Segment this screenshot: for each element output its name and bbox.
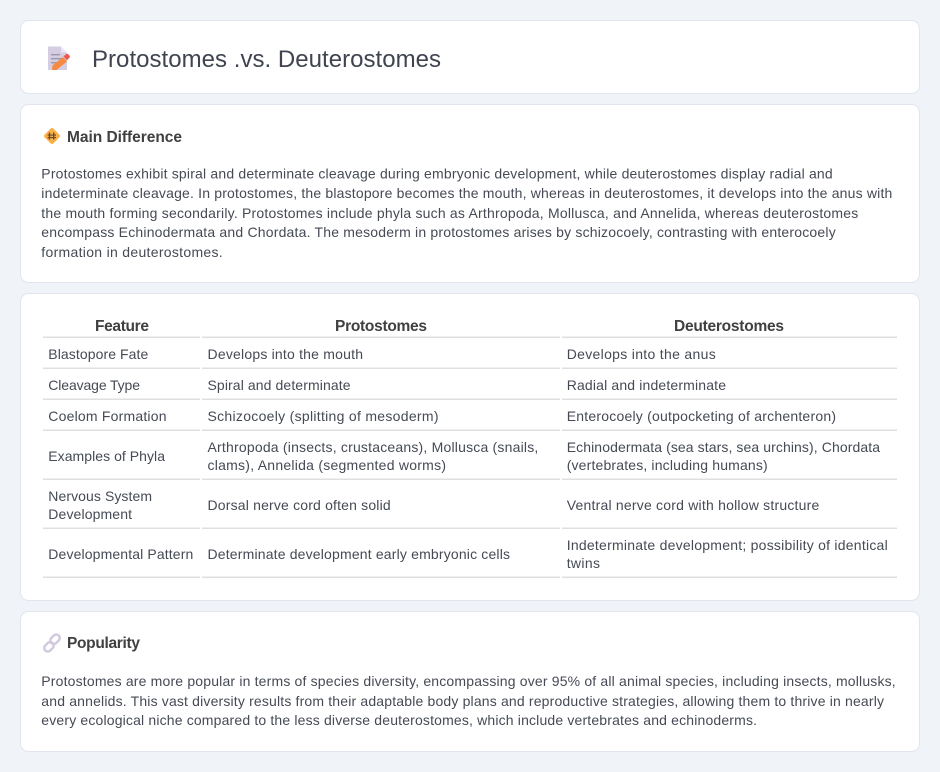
row: coelom formation: Enterocoely (outpocketing of archenteron) [567,408,836,424]
row: nervous system development [48,488,820,522]
table header: Feature [95,318,149,335]
row: developmental pattern [48,537,888,571]
row: cleavage type [48,377,726,393]
heading: main difference: Main Difference [67,129,182,146]
text block: main difference [41,166,892,260]
text block: main difference: the mouth forming secondarily. Protostomes include phyla such as Arthropoda, Mollusca, and Annelida, whereas deuterostomes [41,205,858,221]
text block: main difference: formation in deuterostomes. [41,244,223,260]
row: coelom formation: Coelom Formation [48,408,166,424]
table header [95,318,784,335]
row: examples of phyla [48,439,880,473]
row: examples of phyla: Examples of Phyla [48,448,165,464]
text block: popularity: Protostomes are more popular in terms of species diversity, encompassing over 95% of all animal species, including insects, mollusks, [41,673,896,689]
row: developmental pattern: Determinate development early embryonic cells [208,546,510,562]
row: coelom formation: Schizocoely (splitting of mesoderm) [208,408,438,424]
row: blastopore fate: Blastopore Fate [48,346,149,362]
row: blastopore fate: Develops into the anus [567,346,716,362]
row: nervous system development: Dorsal nerve cord often solid [208,497,391,513]
row: examples of phyla: (vertebrates, including humans) [567,457,768,473]
row: nervous system development: Development [48,506,132,522]
row: examples of phyla: Arthropoda (insects, crustaceans), Mollusca (snails, [208,439,538,455]
text block: popularity: every ecological niche compared to the less diverse deuterostomes, which include vertebrates and echinoderms. [41,712,757,728]
row: blastopore fate [48,346,716,362]
table header: Deuterostomes [674,318,784,335]
row: cleavage type: Cleavage Type [48,377,140,393]
row: examples of phyla: clams), Annelida (segmented worms) [208,457,446,473]
row: cleavage type: Radial and indeterminate [567,377,726,393]
text block: main difference: Protostomes exhibit spiral and determinate cleavage during embryonic development, while deuterostomes display radial and [41,166,833,182]
text block: main difference: encompass Echinodermata and Chordata. The mesoderm in protostomes arises by schizocoely, contrasting with enterocoely [41,224,836,240]
row: blastopore fate: Develops into the mouth [208,346,363,362]
table header: Protostomes [335,318,427,335]
row: examples of phyla: Echinodermata (sea stars, sea urchins), Chordata [567,439,880,455]
panel: comparison table [20,294,920,600]
panel: popularity [20,612,920,752]
panel: main difference [20,104,920,282]
icon: document with pencil [48,46,70,70]
text block: main difference: indeterminate cleavage. In protostomes, the blastopore becomes the mouth, whereas in deuterostomes, it develops into the anus with [41,185,892,201]
row: nervous system development: Ventral nerve cord with hollow structure [567,497,820,513]
icon: chain link [43,633,61,653]
row: developmental pattern: twins [567,555,600,571]
row: nervous system development: Nervous System [48,488,152,504]
row: developmental pattern: Developmental Pattern [48,546,193,562]
icon: warning diamond [43,127,61,145]
row: cleavage type: Spiral and determinate [208,377,351,393]
text block: popularity: and annelids. This vast diversity results from their adaptable body plans and reproductive strategies, allowing them to thrive in nearly [41,693,884,709]
title: Protostomes .vs. Deuterostomes [92,46,441,73]
row: coelom formation [48,408,836,424]
heading: popularity: Popularity [67,635,140,652]
text block: popularity [41,673,896,728]
row: developmental pattern: Indeterminate development; possibility of identical [567,537,888,553]
panel: header [20,20,920,94]
